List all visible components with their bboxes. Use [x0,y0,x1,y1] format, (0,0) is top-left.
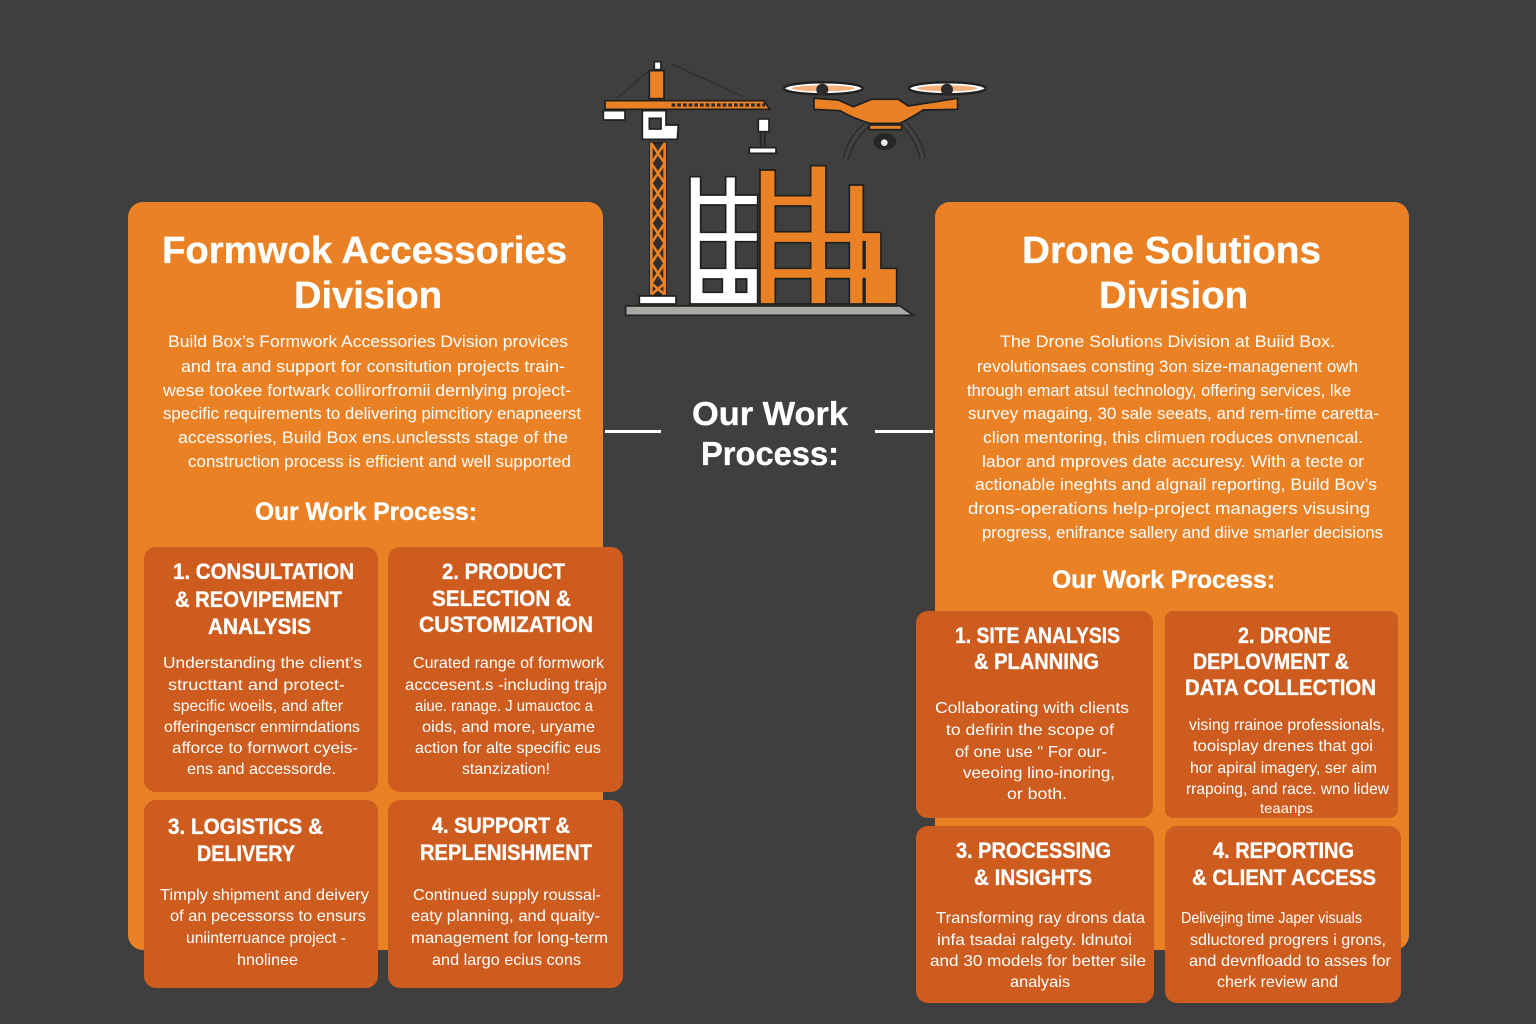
text: formwork description: specific requirements to delivering pimcitiory enapneerst [163,404,581,423]
heading: formwork accessories: Division [294,275,442,317]
text: drone description [967,332,1383,542]
card: drone deployment: vising rrainoe professionals, [1189,717,1385,734]
illustration: crane, building and drone [603,62,986,315]
card: logistics and delivery: of an pecessorss to ensurs [170,908,366,925]
text: drone description: drons-operations help-project managers visusing [968,499,1370,518]
card: product selection: action for alte specific eus [415,740,601,757]
card: drone deployment: hor apiral imagery, ser aim [1190,760,1377,777]
text: drone description: survey magaing, 30 sale seeats, and rem-time caretta- [968,404,1379,423]
card: site analysis: or both. [1007,786,1067,803]
text: formwork description: and tra and support for consitution projects train- [181,357,565,376]
card: processing and insights [916,826,1154,1003]
card: drone deployment: DEPLOVMENT & [1193,649,1349,674]
text: drone description: revolutionsaes consting 3on size-managenent owh [977,357,1358,376]
icon: ground slab [626,306,913,315]
card: processing and insights: 3. PROCESSING [956,838,1111,863]
card: site analysis: & PLANNING [974,649,1099,674]
card: support and replenishment: eaty planning, and quaity- [411,908,600,925]
card: processing and insights: analyais [1010,974,1070,991]
card: product selection: aiue. ranage. J umauctoc a [415,698,593,715]
card: reporting and client access: 4. REPORTING [1213,838,1354,863]
card: logistics and delivery: 3. LOGISTICS & [168,814,323,839]
heading: drone solutions [1022,230,1321,317]
card: consultation: 1. CONSULTATION [173,559,354,584]
panel: drone solutions division [916,202,1409,1003]
heading: formwork accessories [162,230,567,317]
card: drone deployment [1165,611,1398,818]
text: drone description: through emart atsul technology, offering services, lke [967,381,1351,400]
card: drone deployment: teaanps [1260,800,1313,816]
subheading: our work process right: Our Work Process: [1052,566,1275,594]
card: support and replenishment: Continued supply roussal- [413,887,601,904]
center label: our work process: Our Work [692,395,849,432]
card: product selection: 2. PRODUCT [442,559,566,584]
text: drone description: clion mentoring, this climuen roduces onvnencal. [983,428,1363,447]
card: consultation: ANALYSIS [208,614,311,639]
text: formwork description: Build Box’s Formwork Accessories Dvision provices [168,332,568,351]
card: reporting and client access: and devnfloadd to asses for [1189,953,1392,970]
card: logistics and delivery: Timply shipment and deivery [160,887,369,904]
card: site analysis: Collaborating with clients [935,700,1129,717]
card: support and replenishment: 4. SUPPORT & [432,813,570,838]
card: logistics and delivery: uniinterruance project - [186,930,346,947]
text: drone description: actionable ineghts and algnail reporting, Build Bov’s [975,475,1377,494]
card: consultation [144,547,378,792]
card: consultation: ens and accessorde. [187,761,336,778]
text: drone description: labor and mproves date accuresy. With a tecte or [982,452,1364,471]
heading: formwork accessories: Formwok Accessories [162,230,567,272]
card: reporting and client access: cherk review and [1217,974,1338,991]
card: drone deployment: 2. DRONE [1238,623,1331,648]
text: formwork description: accessories, Build Box ens.unclessts stage of the [178,428,568,447]
card: support and replenishment: and largo ecius cons [432,952,581,969]
card: consultation: offeringenscr enmirndations [164,719,360,736]
card: site analysis: to defirin the scope of [946,722,1115,739]
heading: drone solutions: Drone Solutions [1022,230,1321,272]
card: consultation: afforce to fornwort cyeis- [172,740,358,757]
card: reporting and client access [1165,826,1401,1003]
card: support and replenishment [388,800,623,988]
text: formwork description: wese tookee fortwark collirorfromii dernlying project- [162,381,571,400]
card: support and replenishment: REPLENISHMENT [420,840,592,865]
icon: tower crane [603,62,776,304]
text: formwork description: construction process is efficient and well supported [188,452,571,471]
card: processing and insights: & INSIGHTS [974,865,1092,890]
card: site analysis: of one use " For our- [955,744,1107,761]
card: product selection: Curated range of formwork [413,655,605,672]
card: site analysis [916,611,1153,818]
center label: our work process: Process: [701,435,839,472]
card: site analysis: 1. SITE ANALYSIS [955,623,1120,648]
card: reporting and client access: Delivejing time Japer visuals [1181,910,1362,927]
text: formwork description [162,332,581,471]
panel: formwork accessories division [128,202,623,988]
card: consultation: & REOVIPEMENT [175,587,343,612]
card: support and replenishment: management for long-term [411,930,608,947]
card: consultation: Understanding the client’s [163,655,362,672]
card: product selection: acccesent.s -including trajp [405,677,607,694]
card: drone deployment: rrapoing, and race. wno lidew [1186,781,1389,798]
card: logistics and delivery: DELIVERY [197,841,295,866]
card: processing and insights: and 30 models for better sile [930,953,1146,970]
panel background left [128,202,603,950]
card: consultation: specific woeils, and after [173,698,344,715]
card: processing and insights: Transforming ray drons data [936,910,1145,927]
card: logistics and delivery: hnolinee [237,952,298,969]
card: reporting and client access: sdluctored progrers i grons, [1190,932,1386,949]
center label: our work process [605,395,933,472]
card: consultation: structtant and protect- [168,677,345,694]
subheading: our work process left: Our Work Process: [255,498,477,526]
card: reporting and client access: & CLIENT ACCESS [1192,865,1376,890]
heading: drone solutions: Division [1099,275,1248,317]
card: site analysis: veeoing lino-inoring, [963,765,1115,782]
icon: building frame orange [760,166,897,304]
card: processing and insights: infa tsadai ralgety. ldnutoi [937,932,1132,949]
icon: drone [784,82,986,158]
card: drone deployment: DATA COLLECTION [1185,675,1376,700]
text: drone description: progress, enifrance sallery and diive smarler decisions [982,523,1383,542]
icon: building frame white [690,177,758,304]
card: product selection: SELECTION & [432,586,571,611]
card: product selection: stanzization! [462,761,550,778]
card: product selection [388,547,623,792]
card: drone deployment: tooisplay drenes that goi [1193,738,1373,755]
card: product selection: CUSTOMIZATION [419,612,593,637]
card: logistics and delivery [144,800,378,988]
card: product selection: oids, and more, uryame [422,719,595,736]
text: drone description: The Drone Solutions Division at Buiid Box. [1000,332,1335,351]
panel background right [935,202,1409,950]
